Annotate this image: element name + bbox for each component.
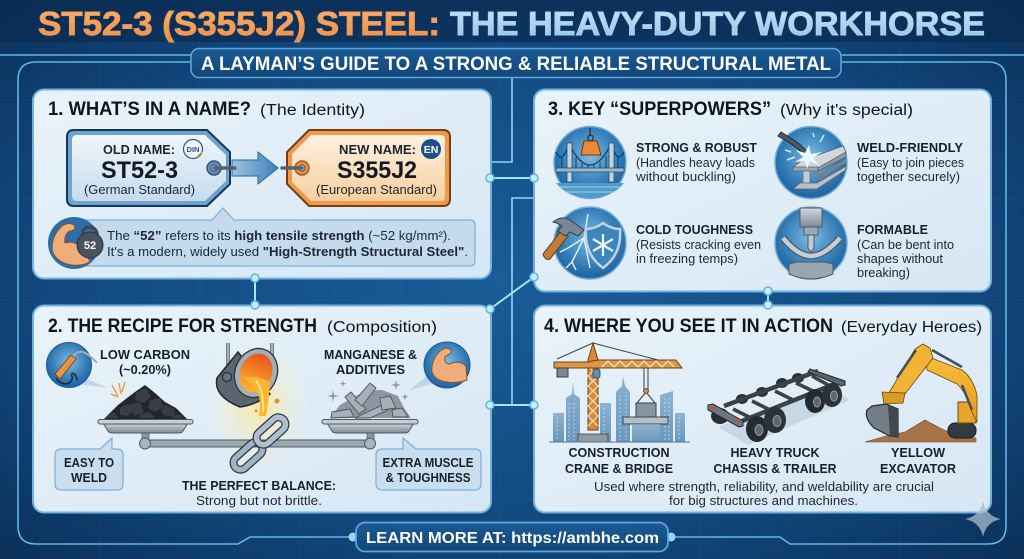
callout: easy to weld: EASY TO (64, 456, 114, 470)
old name tag: ST52-3 (101, 157, 178, 184)
callout: extra muscle (376, 438, 481, 490)
new name tag: S355J2 (337, 157, 417, 184)
icon: sparkle (965, 501, 1001, 537)
callout: easy to weld (55, 438, 123, 490)
labels under illustrations: CHASSIS & TRAILER (714, 461, 837, 476)
text: cold toughness (636, 223, 761, 266)
text: strong and robust: (Handles heavy loads (636, 156, 755, 170)
label: manganese: MANGANESE & (324, 347, 417, 362)
callout: extra muscle: & TOUGHNESS (386, 471, 470, 485)
heading 1: (The Identity) (260, 102, 365, 119)
arrow old to new (214, 152, 278, 184)
text: formable: (Can be bent into (857, 238, 954, 252)
callout: easy to weld: WELD (71, 471, 107, 485)
new name tag (282, 130, 450, 206)
label: manganese (324, 347, 417, 377)
labels under illustrations: EXCAVATOR (880, 461, 957, 476)
additives tray (322, 420, 418, 433)
icon: ladle pouring molten steel (216, 342, 285, 416)
text: formable: shapes without (857, 252, 944, 266)
text: weld friendly: together securely) (857, 170, 960, 184)
subtitle banner: A LAYMAN’S GUIDE TO A STRONG & RELIABLE STRUCTURAL METAL (201, 54, 831, 75)
text: cold toughness: (Resists cracking even (636, 238, 761, 252)
icon: steel chain link (231, 414, 288, 473)
new name tag: (European Standard) (316, 183, 437, 197)
text: weld friendly: WELD-FRIENDLY (857, 141, 964, 155)
heading 3 (548, 99, 913, 120)
text: formable: FORMABLE (857, 223, 928, 237)
new name tag: NEW NAME: (339, 143, 416, 157)
heading 4 (544, 316, 982, 337)
label: low carbon: LOW CARBON (100, 347, 190, 362)
caption (594, 480, 934, 508)
text: weld friendly: (Easy to join pieces (857, 156, 964, 170)
old name tag: DIN (187, 145, 199, 154)
label: low carbon (100, 347, 190, 377)
callout: meaning of 52 (68, 208, 475, 266)
heading 2: 2. THE RECIPE FOR STRENGTH (48, 316, 317, 337)
label: manganese: ADDITIVES (336, 362, 405, 377)
text: the perfect balance: Strong but not brittle. (196, 494, 322, 508)
text: strong and robust: STRONG & ROBUST (636, 141, 757, 155)
balance beam (140, 432, 376, 449)
text: cold toughness: COLD TOUGHNESS (636, 223, 753, 237)
labels under illustrations: CONSTRUCTION (568, 445, 670, 460)
text: weld friendly (857, 141, 964, 184)
new name tag: EN (424, 144, 438, 156)
connector nodes (251, 174, 772, 409)
callout: extra muscle: EXTRA MUSCLE (382, 456, 474, 470)
labels under illustrations (565, 445, 957, 476)
icon: coal pile (104, 385, 187, 419)
icon: muscle arm (410, 342, 470, 390)
glow behind ladle and chain (206, 335, 310, 475)
text: the perfect balance (182, 478, 336, 508)
title (38, 5, 985, 42)
illustration: crane and city (549, 343, 690, 442)
callout: meaning of 52: The “52” refers to its high tensile strength (~52 kg/mm²). (107, 228, 451, 243)
label: low carbon: (~0.20%) (119, 362, 171, 377)
panel 2: recipe for strength (33, 306, 491, 512)
icon: welding torch (46, 342, 125, 397)
callout: meaning of 52: It's a modern, widely used "High-Strength Structural Steel" . (107, 244, 468, 259)
icon: muscle with 52 kettlebell (48, 217, 103, 269)
text: strong and robust (635, 141, 757, 184)
old name tag: OLD NAME: (103, 143, 175, 157)
caption: Used where strength, reliability, and weldability are crucial (594, 480, 934, 494)
text: formable (857, 223, 954, 280)
icon: hammer and frost shield (543, 207, 626, 279)
title: THE HEAVY-DUTY WORKHORSE (450, 5, 985, 42)
labels under illustrations: YELLOW (891, 445, 946, 460)
panel 1: what's in a name (33, 90, 491, 278)
illustration: yellow excavator (865, 344, 977, 442)
heading 2: (Composition) (327, 319, 437, 336)
heading 1 (48, 99, 365, 120)
text: the perfect balance: THE PERFECT BALANCE: (182, 478, 336, 493)
coal tray (98, 420, 193, 433)
footer banner: LEARN MORE AT: https://ambhe.com (366, 530, 659, 547)
icon: bending press (775, 207, 847, 279)
old name tag: (German Standard) (84, 183, 195, 197)
panel 3: superpowers (534, 90, 991, 292)
heading 3: 3. KEY “SUPERPOWERS” (548, 99, 771, 120)
panel 4: where you see it (534, 306, 991, 512)
heading 4: (Everyday Heroes) (841, 319, 982, 336)
icon: welding beam (775, 126, 847, 198)
icon: metal additives pile (327, 380, 411, 418)
labels under illustrations: HEAVY TRUCK (730, 445, 820, 460)
caption: for big structures and machines. (669, 494, 858, 508)
icon: muscle with 52 kettlebell: 52 (84, 240, 96, 252)
title: ST52-3 (S355J2) STEEL: (38, 5, 440, 42)
heading 1: 1. WHAT’S IN A NAME? (48, 99, 251, 120)
text: cold toughness: in freezing temps) (636, 252, 738, 266)
icon: bridge with weight (554, 126, 626, 198)
illustration: truck chassis (708, 369, 850, 445)
heading 3: (Why it's special) (780, 102, 913, 119)
footer banner (348, 522, 676, 552)
labels under illustrations: CRANE & BRIDGE (565, 461, 673, 476)
text: formable: breaking) (857, 266, 910, 280)
heading 4: 4. WHERE YOU SEE IT IN ACTION (544, 316, 833, 337)
text: strong and robust: without buckling) (635, 170, 736, 184)
old name tag (67, 130, 230, 206)
